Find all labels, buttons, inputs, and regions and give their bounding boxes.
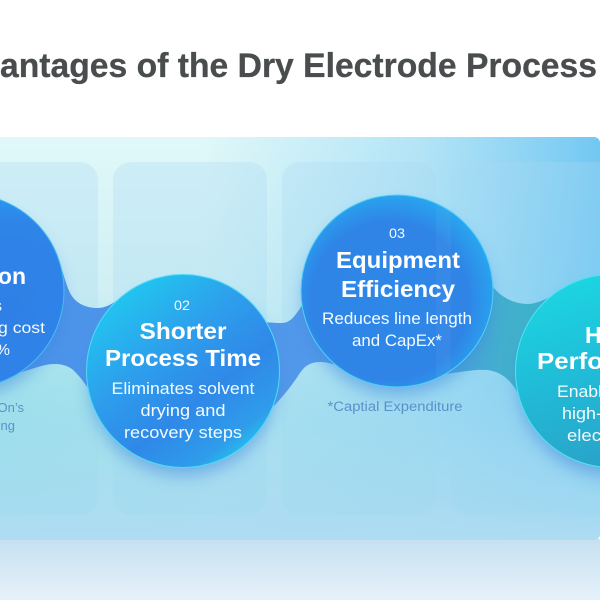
card 3 (282, 162, 436, 515)
circle 1 footnote: ng (1, 418, 15, 433)
circle shadows (0, 206, 600, 476)
circle 4 title: Perfo (537, 348, 600, 374)
circle 4 body (557, 383, 600, 445)
card 2 (113, 162, 267, 515)
circle 1: partial (0, 194, 64, 388)
card 4 (451, 162, 600, 515)
floor gradient (0, 539, 600, 600)
circle 3 body: and CapEx* (352, 332, 443, 350)
circle 4 body: high- (562, 405, 600, 423)
circle 2 body: drying and (140, 402, 226, 420)
circle 2 title: Shorter (140, 318, 227, 344)
circle 4: partial (516, 274, 600, 468)
circle 2 title (105, 318, 261, 371)
circle 2: shorter process time (86, 274, 280, 468)
circle 2 body (112, 380, 255, 442)
circle 4 title (537, 322, 600, 374)
circle 4 body: elec (567, 427, 600, 445)
circle 3 title (336, 247, 460, 302)
circle 2 title: Process Time (105, 345, 261, 371)
step number 02: 02 (174, 297, 190, 313)
panel: gradient background (0, 137, 600, 540)
circle 3 title: Equipment (336, 247, 460, 273)
panel: background cards (0, 162, 600, 515)
circle 2 body: recovery steps (124, 424, 242, 442)
connecting ribbon (0, 240, 600, 412)
circle 3 title: Efficiency (341, 276, 455, 302)
circle 1 body (0, 298, 46, 359)
title: antages of the Dry Electrode Process (0, 47, 597, 85)
circle 2 body: Eliminates solvent (112, 380, 255, 398)
circle 3: equipment efficiency (301, 190, 493, 390)
step number 03: 03 (389, 225, 405, 241)
circle 3 body (322, 310, 472, 350)
card 1 (0, 162, 98, 515)
circle 3 body: Reduces line length (322, 310, 472, 328)
circle 3 footnote: *Captial Expenditure (328, 399, 462, 414)
circle 1 footnote (0, 400, 24, 433)
circle 4 body: Enabl (557, 383, 600, 401)
